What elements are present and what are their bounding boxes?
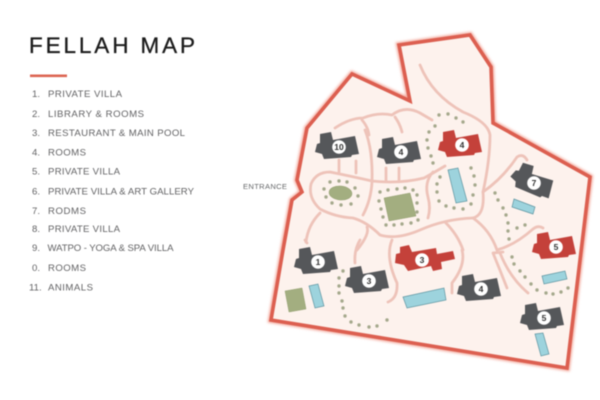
building 10	[315, 132, 359, 159]
legend list: ROOMS	[48, 148, 86, 158]
pool: villa 5 lower	[535, 333, 549, 356]
legend list: WATPO - YOGA & SPA VILLA	[48, 243, 174, 254]
building 4 dark upper	[377, 137, 421, 164]
pool: main	[403, 288, 446, 308]
building 4 red: 4	[460, 140, 465, 150]
building 10: 10	[334, 142, 344, 152]
legend list: 2.	[32, 109, 40, 120]
legend list: RODMS	[48, 206, 86, 217]
legend list: 0.	[32, 263, 40, 274]
accent rule	[30, 74, 67, 77]
legend list: 4.	[32, 148, 40, 158]
pool: villa 5 upper	[542, 271, 567, 284]
legend list: 5.	[32, 166, 40, 178]
building 3 dark: 3	[367, 276, 372, 286]
entrance label: ENTRANCE	[243, 182, 287, 191]
legend list: 7.	[32, 206, 40, 217]
legend list: ANIMALS	[48, 282, 93, 294]
tree dots	[322, 112, 570, 329]
building 3 dark	[345, 266, 389, 293]
legend list: 6.	[32, 186, 40, 198]
building 3 red	[395, 245, 455, 271]
legend list: 9.	[32, 243, 40, 254]
building 1	[294, 247, 338, 274]
legend list: PRIVATE VILLA	[48, 89, 123, 100]
legend list: 1.	[32, 89, 40, 100]
paths	[305, 65, 543, 302]
green square lawn	[384, 193, 416, 221]
green oval lawn	[328, 185, 353, 201]
map site	[271, 35, 590, 368]
legend list: PRIVATE VILLA	[48, 166, 121, 178]
pool: villa 1	[309, 284, 324, 308]
building 3 red: 3	[420, 255, 425, 265]
building 4 dark upper: 4	[399, 147, 404, 157]
legend list: 11.	[29, 282, 42, 294]
legend list: 3.	[32, 128, 40, 139]
building 1: 1	[316, 257, 321, 267]
building 4 red	[438, 130, 482, 157]
building 5 dark lower	[520, 303, 564, 330]
building 4 dark lower	[457, 274, 501, 301]
building 7: 7	[532, 178, 537, 188]
legend list: ROOMS	[48, 263, 86, 274]
building 5 dark lower: 5	[542, 313, 547, 323]
green rectangle lawn	[285, 288, 306, 312]
legend list	[29, 89, 195, 294]
building 5 red	[532, 232, 576, 259]
building 4 dark lower: 4	[479, 284, 484, 294]
building 5 red: 5	[554, 242, 559, 252]
site boundary	[271, 35, 590, 368]
pool: tall	[448, 168, 467, 203]
title: FELLAH MAP	[29, 33, 195, 58]
legend list: LIBRARY & ROOMS	[48, 109, 144, 120]
legend list: PRIVATE VILLA & ART GALLERY	[48, 186, 195, 198]
legend list: 8.	[32, 224, 40, 235]
pool: villa 7	[512, 199, 535, 214]
building 7	[507, 159, 559, 203]
legend list: RESTAURANT & MAIN POOL	[48, 128, 186, 139]
legend list: PRIVATE VILLA	[48, 224, 121, 235]
